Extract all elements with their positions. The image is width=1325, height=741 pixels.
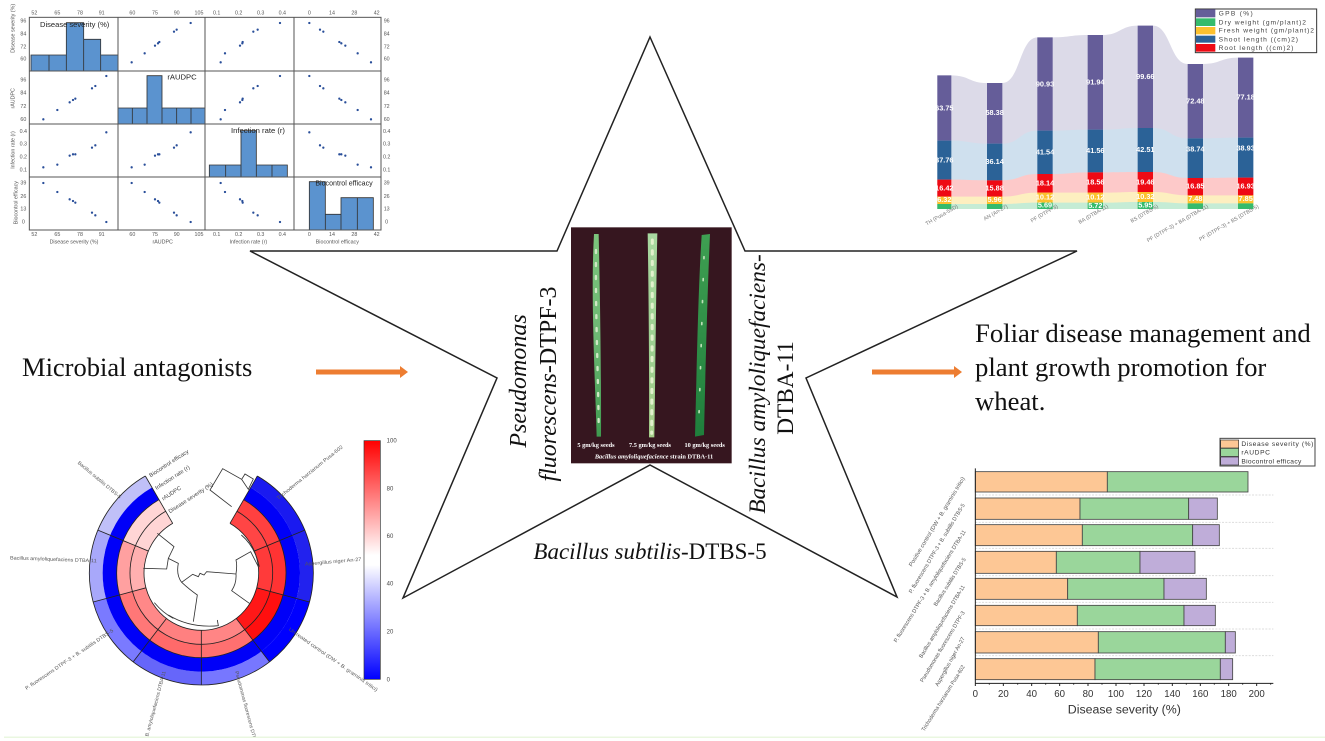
bar value labels: 16.85: [1186, 182, 1205, 191]
category labels: Aspergillus niger An-27: [935, 636, 967, 688]
axis tick labels: 160: [1192, 689, 1208, 700]
axis tick labels: 39: [20, 180, 26, 186]
axis tick labels: 75: [152, 232, 158, 238]
axis tick labels: 105: [195, 10, 203, 16]
axis tick labels: 20: [998, 689, 1009, 700]
colour scale: [364, 439, 397, 683]
bar value labels: 72.48: [1186, 96, 1205, 105]
label: Bacillus amyloliquefaciens strain: [745, 254, 799, 514]
arrow: right orange: [872, 366, 962, 378]
axis tick labels: 65: [54, 232, 60, 238]
category labels: [925, 204, 1260, 244]
axis tick labels: 72: [20, 104, 26, 110]
axis tick labels: 42: [374, 232, 380, 238]
bar value labels: [935, 72, 1255, 210]
central star outline: [250, 37, 1077, 598]
category labels: BA (DTBA-11): [1078, 204, 1110, 226]
axis tick labels: 52: [31, 232, 37, 238]
axis tick labels: 60: [129, 10, 135, 16]
histograms on diagonal: [31, 23, 373, 230]
label: Pseudomonas fluorescens strain: [506, 286, 562, 482]
bar value labels: 16.93: [1236, 181, 1255, 190]
category labels: Bacillus amyloliquefaciens DTBA-11: [918, 585, 967, 659]
category labels: Bacillus subtilis DTBS-5: [933, 557, 968, 608]
legend: Root length ((cm)2): [1219, 45, 1293, 52]
axis tick labels: 0.3: [257, 10, 264, 16]
axis tick labels: 105: [195, 232, 203, 238]
axis titles: rAUDPC: [11, 88, 17, 109]
heatmap rings: [48, 420, 354, 726]
panel: stacked bar chart with ribbons: [925, 9, 1317, 244]
bar value labels: 37.76: [935, 155, 954, 164]
colour scale: 100: [387, 439, 397, 445]
arrow: left orange: [316, 366, 408, 378]
category labels: P. fluorescens DTPF-3 + B. subtilis DTBS-5: [908, 503, 967, 595]
label: Pseudomonas fluorescens strain: fluorescens-DTPF-3: [536, 286, 562, 482]
histogram titles: rAUDPC: [167, 73, 197, 82]
axis tick labels: 0.3: [383, 142, 390, 148]
panel: correlation scatter matrix: [11, 4, 390, 245]
legend: GPB (%): [1219, 11, 1253, 18]
axis tick labels: 60: [20, 57, 26, 63]
axis titles: Infection rate (r): [11, 131, 17, 169]
axis tick labels: 140: [1164, 689, 1180, 700]
colour scale: 40: [387, 582, 394, 588]
heatmap labels: B. amyloliquefaciens DTBA-11: [144, 670, 168, 737]
histogram titles: Biocontrol efficacy: [315, 179, 373, 188]
bar value labels: 7.48: [1188, 194, 1202, 203]
axis tick labels: 39: [384, 180, 390, 186]
axis tick labels: 120: [1136, 689, 1152, 700]
axis tick labels: 91: [99, 10, 105, 16]
bar value labels: 77.18: [1236, 93, 1255, 102]
axis tick labels: 0.1: [383, 168, 390, 174]
category labels: PF (DTPF-3) + BA (DTBA-11): [1146, 204, 1210, 244]
bar value labels: 91.94: [1086, 78, 1105, 87]
bottom strip: [0, 736, 1325, 741]
axis tick labels: 180: [1221, 689, 1237, 700]
text: outcome statement: [975, 318, 1311, 416]
axis tick labels: 26: [20, 194, 26, 200]
axis tick labels: 0.2: [235, 10, 242, 16]
axis tick labels: 52: [31, 10, 37, 16]
colour scale: 80: [387, 486, 394, 492]
panel: circular heatmap: [10, 420, 397, 741]
heatmap labels: Bacillus subtilis DTBS-5: [76, 460, 122, 500]
ribbon areas: [937, 26, 1253, 209]
axis titles: rAUDPC: [152, 239, 173, 245]
leaf: 7.5 gm/kg: [648, 233, 657, 437]
category labels: Pseudomonas fluorescens DTPF-3: [920, 611, 967, 684]
axis titles: [11, 4, 359, 245]
legend: [1195, 9, 1317, 53]
axis tick labels: 0: [22, 220, 25, 226]
bar value labels: 5.96: [988, 195, 1002, 204]
text: outcome statement: plant growth promotion for: [975, 352, 1266, 382]
axis tick labels: 100: [1108, 689, 1124, 700]
bar value labels: 99.66: [1136, 72, 1155, 81]
axis tick labels: 14: [329, 10, 335, 16]
bar value labels: 36.14: [985, 157, 1005, 166]
text: outcome statement: Foliar disease management and: [975, 318, 1311, 348]
category labels: AN (An-27): [983, 204, 1009, 222]
bar value labels: 16.42: [935, 183, 954, 192]
axis tick labels: 84: [384, 31, 390, 37]
category labels: Trichoderma harzianum Pusa-602: [921, 665, 967, 733]
bar value labels: 90.93: [1036, 79, 1054, 88]
axis tick labels: 0.3: [20, 142, 27, 148]
axis tick labels: 65: [54, 10, 60, 16]
bar value labels: 63.75: [935, 104, 954, 113]
bar value labels: 6.32: [937, 195, 951, 204]
heatmap labels: Disease severity (%): [168, 482, 215, 515]
axis tick labels: 0: [308, 232, 311, 238]
legend: rAUDPC: [1241, 449, 1270, 456]
axis tick labels: 0.3: [257, 232, 264, 238]
legend: Dry weight (gm/plant)2: [1219, 19, 1306, 26]
axis tick labels: 0.2: [235, 232, 242, 238]
bar value labels: 5.69: [1038, 200, 1052, 209]
category labels: Positive control (DW + B. graminis tritici): [908, 476, 967, 568]
colour scale: 60: [387, 534, 394, 540]
axis tick labels: 78: [77, 232, 83, 238]
axis tick labels: 0.2: [383, 155, 390, 161]
bar value labels: 7.85: [1239, 194, 1253, 203]
photo captions: [577, 442, 725, 461]
label: Bacillus subtilis strain: Bacillus subtilis-DTBS-5: [533, 539, 767, 564]
category labels: PF (DTPF-3) + BS (DTBS-5): [1198, 204, 1260, 243]
axis tick labels: 84: [384, 91, 390, 97]
axis tick labels: 96: [384, 18, 390, 24]
colour scale: 20: [387, 630, 394, 636]
leaf: 5 gm/kg: [593, 234, 601, 437]
category labels: [893, 476, 968, 733]
heatmap labels: Aspergillus niger An-27: [305, 557, 362, 568]
bar value labels: 58.38: [985, 108, 1004, 117]
text: outcome statement: wheat.: [975, 386, 1045, 416]
heatmap labels: rAUDPC: [161, 485, 183, 502]
axis titles: Infection rate (r): [230, 239, 267, 245]
axis tick labels: 84: [20, 31, 26, 37]
axis tick labels: [20, 10, 390, 238]
photo captions: Bacillus amyloliquefacience strain DTBA-11: [594, 454, 713, 461]
bar value labels: 10.12: [1036, 193, 1054, 202]
axis tick labels: 90: [174, 232, 180, 238]
bar value labels: 41.56: [1086, 146, 1105, 155]
axis titles: Biocontrol efficacy: [13, 181, 19, 224]
axis tick labels: 0: [973, 689, 978, 700]
axis tick labels: 0.1: [20, 168, 27, 174]
legend: Biocontrol efficacy: [1241, 458, 1302, 465]
axes: [975, 468, 1273, 686]
legend: Fresh weight (gm/plant)2: [1219, 28, 1314, 35]
category labels: PF (DTPF-3): [1030, 204, 1060, 224]
bar value labels: 38.93: [1236, 144, 1255, 153]
axis tick labels: 0.4: [383, 129, 390, 135]
label: Bacillus amyloliquefaciens strain: Bacillus amyloliquefaciens-: [745, 254, 771, 514]
legend: [1220, 438, 1315, 466]
axis tick labels: 78: [77, 10, 83, 16]
axis tick labels: 42: [374, 10, 380, 16]
heatmap labels: Trichoderma harzianum Pusa-602: [276, 444, 345, 502]
axis tick labels: 75: [152, 10, 158, 16]
colour scale: 0: [387, 677, 391, 683]
bar value labels: 42.51: [1136, 145, 1155, 154]
axis tick labels: 0.4: [279, 232, 286, 238]
heatmap labels: Biocontrol efficacy: [148, 449, 190, 479]
bar value labels: 18.14: [1036, 178, 1055, 187]
axis tick labels: 0.1: [213, 232, 220, 238]
photo captions: 10 gm/kg seeds: [684, 442, 725, 449]
heatmap labels: Infection rate (r): [154, 465, 191, 492]
axis tick labels: 28: [351, 232, 357, 238]
bar value labels: 19.46: [1136, 177, 1155, 186]
axis tick labels: 14: [329, 232, 335, 238]
scatter points: [43, 23, 371, 222]
bar value labels: 38.74: [1186, 144, 1205, 153]
axis tick labels: 0.4: [20, 129, 27, 135]
axis tick labels: 96: [384, 77, 390, 83]
category labels: TH (Pusa-5SD): [925, 204, 960, 227]
axis tick labels: 0.1: [213, 10, 220, 16]
axis tick labels: 96: [20, 18, 26, 24]
heading: microbial antagonists: Microbial antagonists: [22, 352, 252, 382]
panel: wheat leaf photograph: [571, 227, 732, 463]
heatmap labels: P. fluorescens DTPF-3 + B. subtilis DTBS-5: [24, 628, 115, 692]
axis tick labels: 28: [351, 10, 357, 16]
axis tick labels: 72: [20, 44, 26, 50]
leaf: 10 gm/kg: [695, 234, 710, 437]
axis tick labels: 13: [384, 207, 390, 213]
legend: Shoot length ((cm)2): [1219, 36, 1298, 43]
photo captions: 5 gm/kg seeds: [577, 442, 615, 449]
axis tick labels: [973, 689, 1265, 700]
axis tick labels: 84: [20, 91, 26, 97]
bar value labels: 5.95: [1138, 200, 1152, 209]
category labels: BS (DTBS-5): [1130, 204, 1160, 225]
axis tick labels: 60: [20, 117, 26, 123]
axis tick labels: 91: [99, 232, 105, 238]
axis tick labels: 40: [1026, 689, 1037, 700]
histogram titles: Disease severity (%): [40, 20, 110, 29]
dendrogram: [143, 469, 259, 626]
axis titles: Disease severity (%): [11, 4, 17, 53]
label: Bacillus amyloliquefaciens strain: DTBA-11: [773, 341, 799, 435]
axis tick labels: 60: [1054, 689, 1065, 700]
bar value labels: 10.12: [1086, 193, 1105, 202]
bar value labels: 41.54: [1036, 148, 1055, 157]
axis tick labels: 80: [1083, 689, 1093, 700]
bars: [975, 472, 1248, 680]
histogram titles: Infection rate (r): [231, 126, 285, 135]
axis tick labels: 13: [20, 207, 26, 213]
bars: [937, 26, 1253, 209]
gridlines: [975, 495, 1273, 656]
bar value labels: 15.88: [985, 183, 1004, 192]
heatmap labels: Untreated control (DW + B. graminis tritici): [287, 627, 379, 693]
axis tick labels: 60: [384, 117, 390, 123]
bar value labels: 18.56: [1086, 177, 1105, 186]
axis tick labels: 60: [129, 232, 135, 238]
heatmap labels: [10, 444, 379, 741]
legend: Disease severity (%): [1241, 441, 1313, 448]
panel: horizontal stacked bars: [893, 438, 1315, 733]
matrix grid: [29, 17, 381, 230]
axis tick labels: 200: [1249, 689, 1265, 700]
photo captions: 7.5 gm/kg seeds: [629, 442, 672, 449]
axis tick labels: 0: [308, 10, 311, 16]
axis tick labels: 0.4: [279, 10, 286, 16]
axis tick labels: 60: [384, 57, 390, 63]
label: Pseudomonas fluorescens strain: Pseudomonas: [506, 314, 532, 449]
axis tick labels: 90: [174, 10, 180, 16]
axis titles: Disease severity (%): [50, 239, 99, 245]
axis tick labels: 26: [384, 194, 390, 200]
axis tick labels: 96: [20, 77, 26, 83]
heatmap labels: Bacillus amyloliquefaciens DTBA-11: [10, 555, 97, 564]
axis title: Disease severity (%): [1068, 702, 1181, 716]
category labels: P. fluorescens DTPF-3 + B. amyloliquefaciens DTBA-11: [893, 530, 968, 644]
axis titles: Biocontrol efficacy: [316, 239, 359, 245]
axis tick labels: 72: [384, 104, 390, 110]
axis tick labels: 72: [384, 44, 390, 50]
axis tick labels: 0.2: [20, 155, 27, 161]
bar value labels: 10.32: [1136, 192, 1155, 201]
axis tick labels: 0: [385, 220, 388, 226]
histogram titles: [40, 20, 373, 188]
bar value labels: 5.72: [1088, 201, 1102, 210]
